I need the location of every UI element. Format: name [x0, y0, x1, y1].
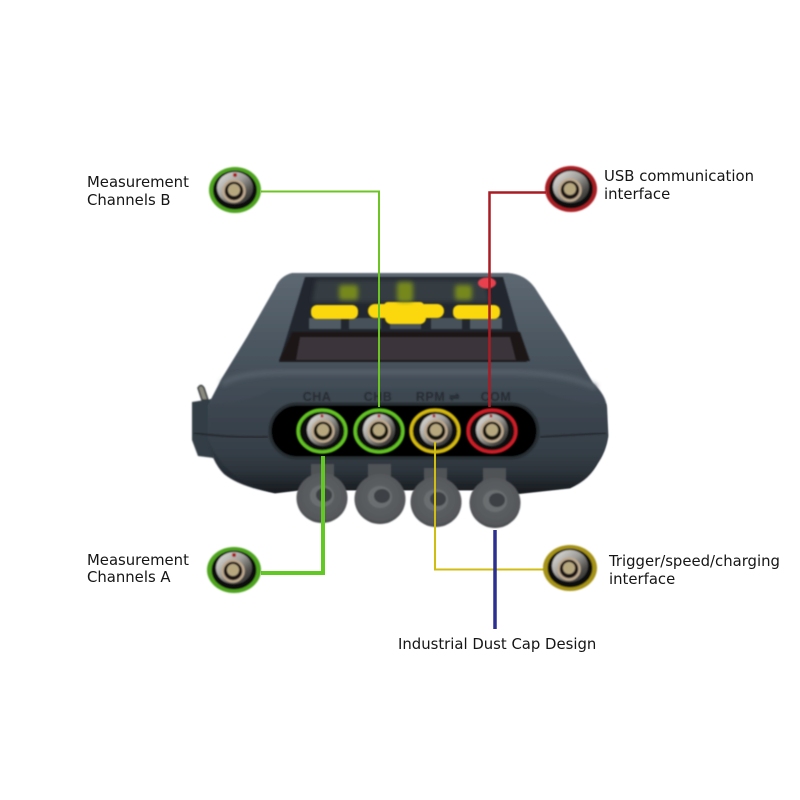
- yellow buttons: [311, 302, 500, 324]
- port: RPM: [411, 410, 459, 452]
- front face band: [209, 388, 608, 494]
- icon: channels B connector: [209, 167, 261, 213]
- dust cap 2: [354, 464, 406, 524]
- dust cap 1: [296, 464, 348, 523]
- body seam: [194, 433, 606, 437]
- icon: USB connector: [545, 166, 597, 212]
- port labels: CHB: [364, 390, 392, 404]
- dust cap 4: [470, 468, 520, 528]
- olive key labels: [339, 282, 472, 302]
- label: Measurement Channels A: Measurement: [87, 551, 189, 569]
- keypad surface: [312, 280, 490, 302]
- device: handheld instrument: [192, 273, 608, 528]
- leader line: dust cap: [493, 530, 497, 629]
- label: Trigger/speed/charging interface: interface: [609, 570, 675, 588]
- port labels: CHA: [303, 390, 331, 404]
- leader line: trigger: [435, 442, 544, 570]
- icon: channels A connector: [207, 547, 261, 593]
- port labels: [303, 390, 511, 404]
- port: CHA: [298, 410, 346, 452]
- red power button: [478, 278, 496, 288]
- label: USB communication interface: USB communication: [604, 167, 754, 185]
- label: Trigger/speed/charging interface: Trigger/speed/charging: [609, 552, 780, 570]
- top keypad recess: [279, 277, 527, 362]
- leader line: USB: [490, 192, 546, 407]
- connector slot: [270, 404, 538, 458]
- port: CHB: [355, 410, 403, 452]
- side hook: [192, 386, 214, 458]
- rubber body: [208, 273, 608, 494]
- icon: trigger connector: [543, 545, 597, 591]
- label: Measurement Channels B: Channels B: [87, 191, 171, 209]
- display screen: [279, 332, 530, 361]
- dust cap 3: [410, 468, 462, 527]
- leader line: channels B: [261, 192, 379, 407]
- port labels: RPM ⇌: [416, 390, 460, 404]
- label: Measurement Channels B: Measurement: [87, 173, 189, 191]
- label: Measurement Channels A: Channels A: [87, 568, 171, 586]
- port: COM: [468, 410, 516, 452]
- leader line: channels A: [261, 456, 323, 573]
- label: Industrial Dust Cap Design: Industrial Dust Cap Design: [398, 635, 596, 653]
- bumper highlight: [222, 372, 596, 388]
- port labels: COM: [481, 390, 511, 404]
- label: USB communication interface: interface: [604, 185, 670, 203]
- function buttons row: [309, 318, 502, 329]
